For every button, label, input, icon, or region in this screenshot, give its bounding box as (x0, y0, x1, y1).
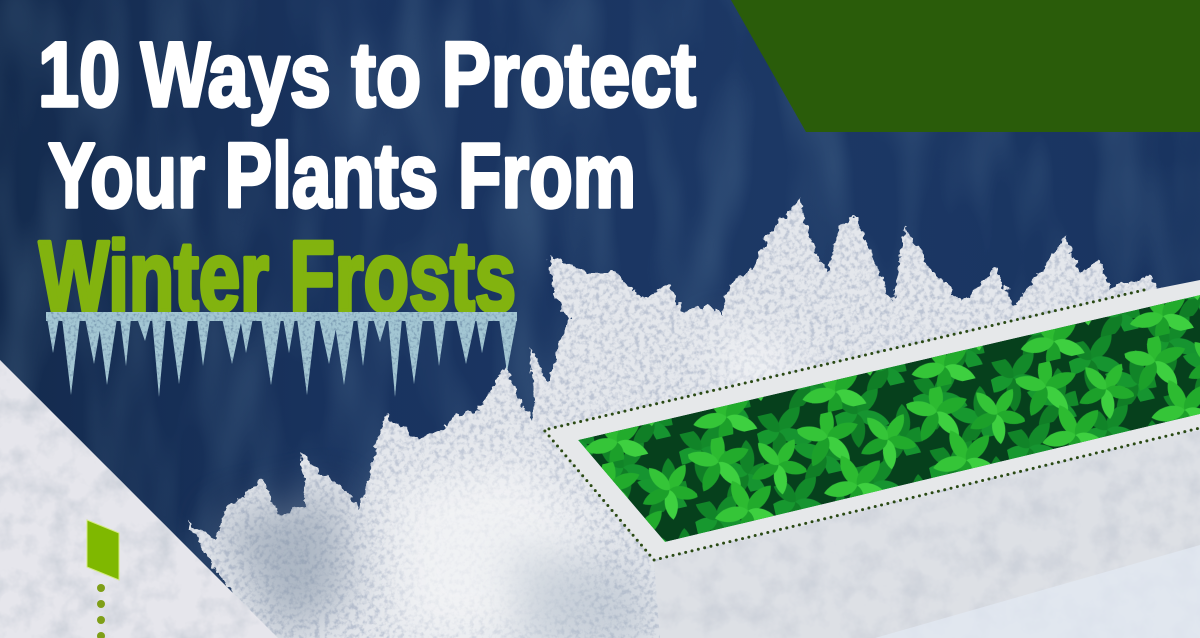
dotted timeline (97, 584, 105, 638)
snow band around plant window (544, 280, 1200, 560)
icicles under title (46, 312, 517, 397)
lower snow field (654, 430, 1200, 638)
plant window: green leaves (578, 295, 1200, 542)
dotted frame around plant window (544, 290, 1200, 560)
lighter snow corner, bottom right (875, 545, 1200, 638)
title (38, 24, 696, 333)
title: Winter Frosts (39, 221, 516, 333)
icon: green tag marker (87, 520, 119, 580)
title: 10 Ways to Protect (38, 24, 696, 126)
frost crystals (185, 198, 1200, 638)
title: Your Plants From (48, 125, 636, 227)
snow panel: bottom left triangle (0, 360, 278, 638)
corner shape: dark green parallelogram (731, 0, 1200, 132)
